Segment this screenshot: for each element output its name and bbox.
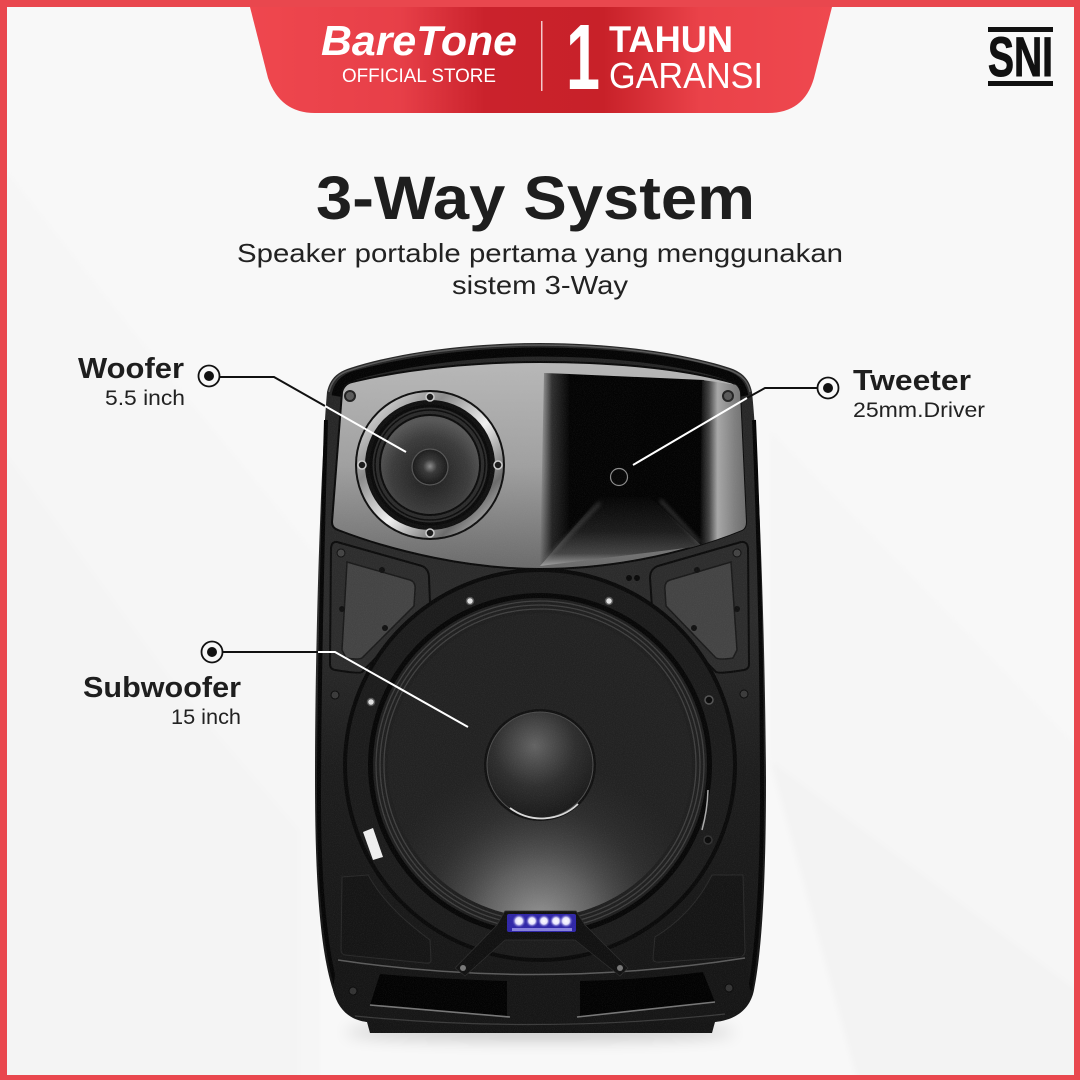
subwoofer driver [331,568,748,962]
tweeter size: 25mm.Driver [853,399,985,422]
callout: woofer [78,353,406,452]
photo grain [315,343,766,1033]
tweeter label: Tweeter [853,365,971,397]
callout: subwoofer [83,642,468,729]
title: 3-Way System [316,164,755,232]
top panel [332,362,750,569]
header banner [250,5,832,113]
woofer size: 5.5 inch [105,387,185,410]
LED bracket and blue LED bar [455,911,628,976]
right side panel [626,542,749,673]
woofer label: Woofer [78,353,184,385]
speaker body [315,343,766,1033]
left side panel [330,542,430,673]
speaker shadow [345,1024,735,1040]
subtitle: Speaker portable pertama yang menggunakan [237,238,843,268]
horn tweeter [540,373,750,566]
bottom handle [333,956,750,1025]
official store label: OFFICIAL STORE [342,66,496,87]
warranty garansi: GARANSI [609,55,763,96]
callout: tweeter [633,365,985,465]
brand name: BareTone [321,17,517,64]
warranty number: 1 [566,5,600,109]
warranty tahun: TAHUN [609,19,733,60]
white label sticker [363,828,383,860]
subwoofer size: 15 inch [171,706,241,729]
woofer driver [355,390,505,540]
SNI logo: SNI [988,25,1053,88]
subtitle: sistem 3-Way [452,270,628,300]
subwoofer label: Subwoofer [83,672,241,704]
subtitle [237,238,843,300]
lower corner panels [341,875,745,963]
speaker product [315,343,766,1033]
